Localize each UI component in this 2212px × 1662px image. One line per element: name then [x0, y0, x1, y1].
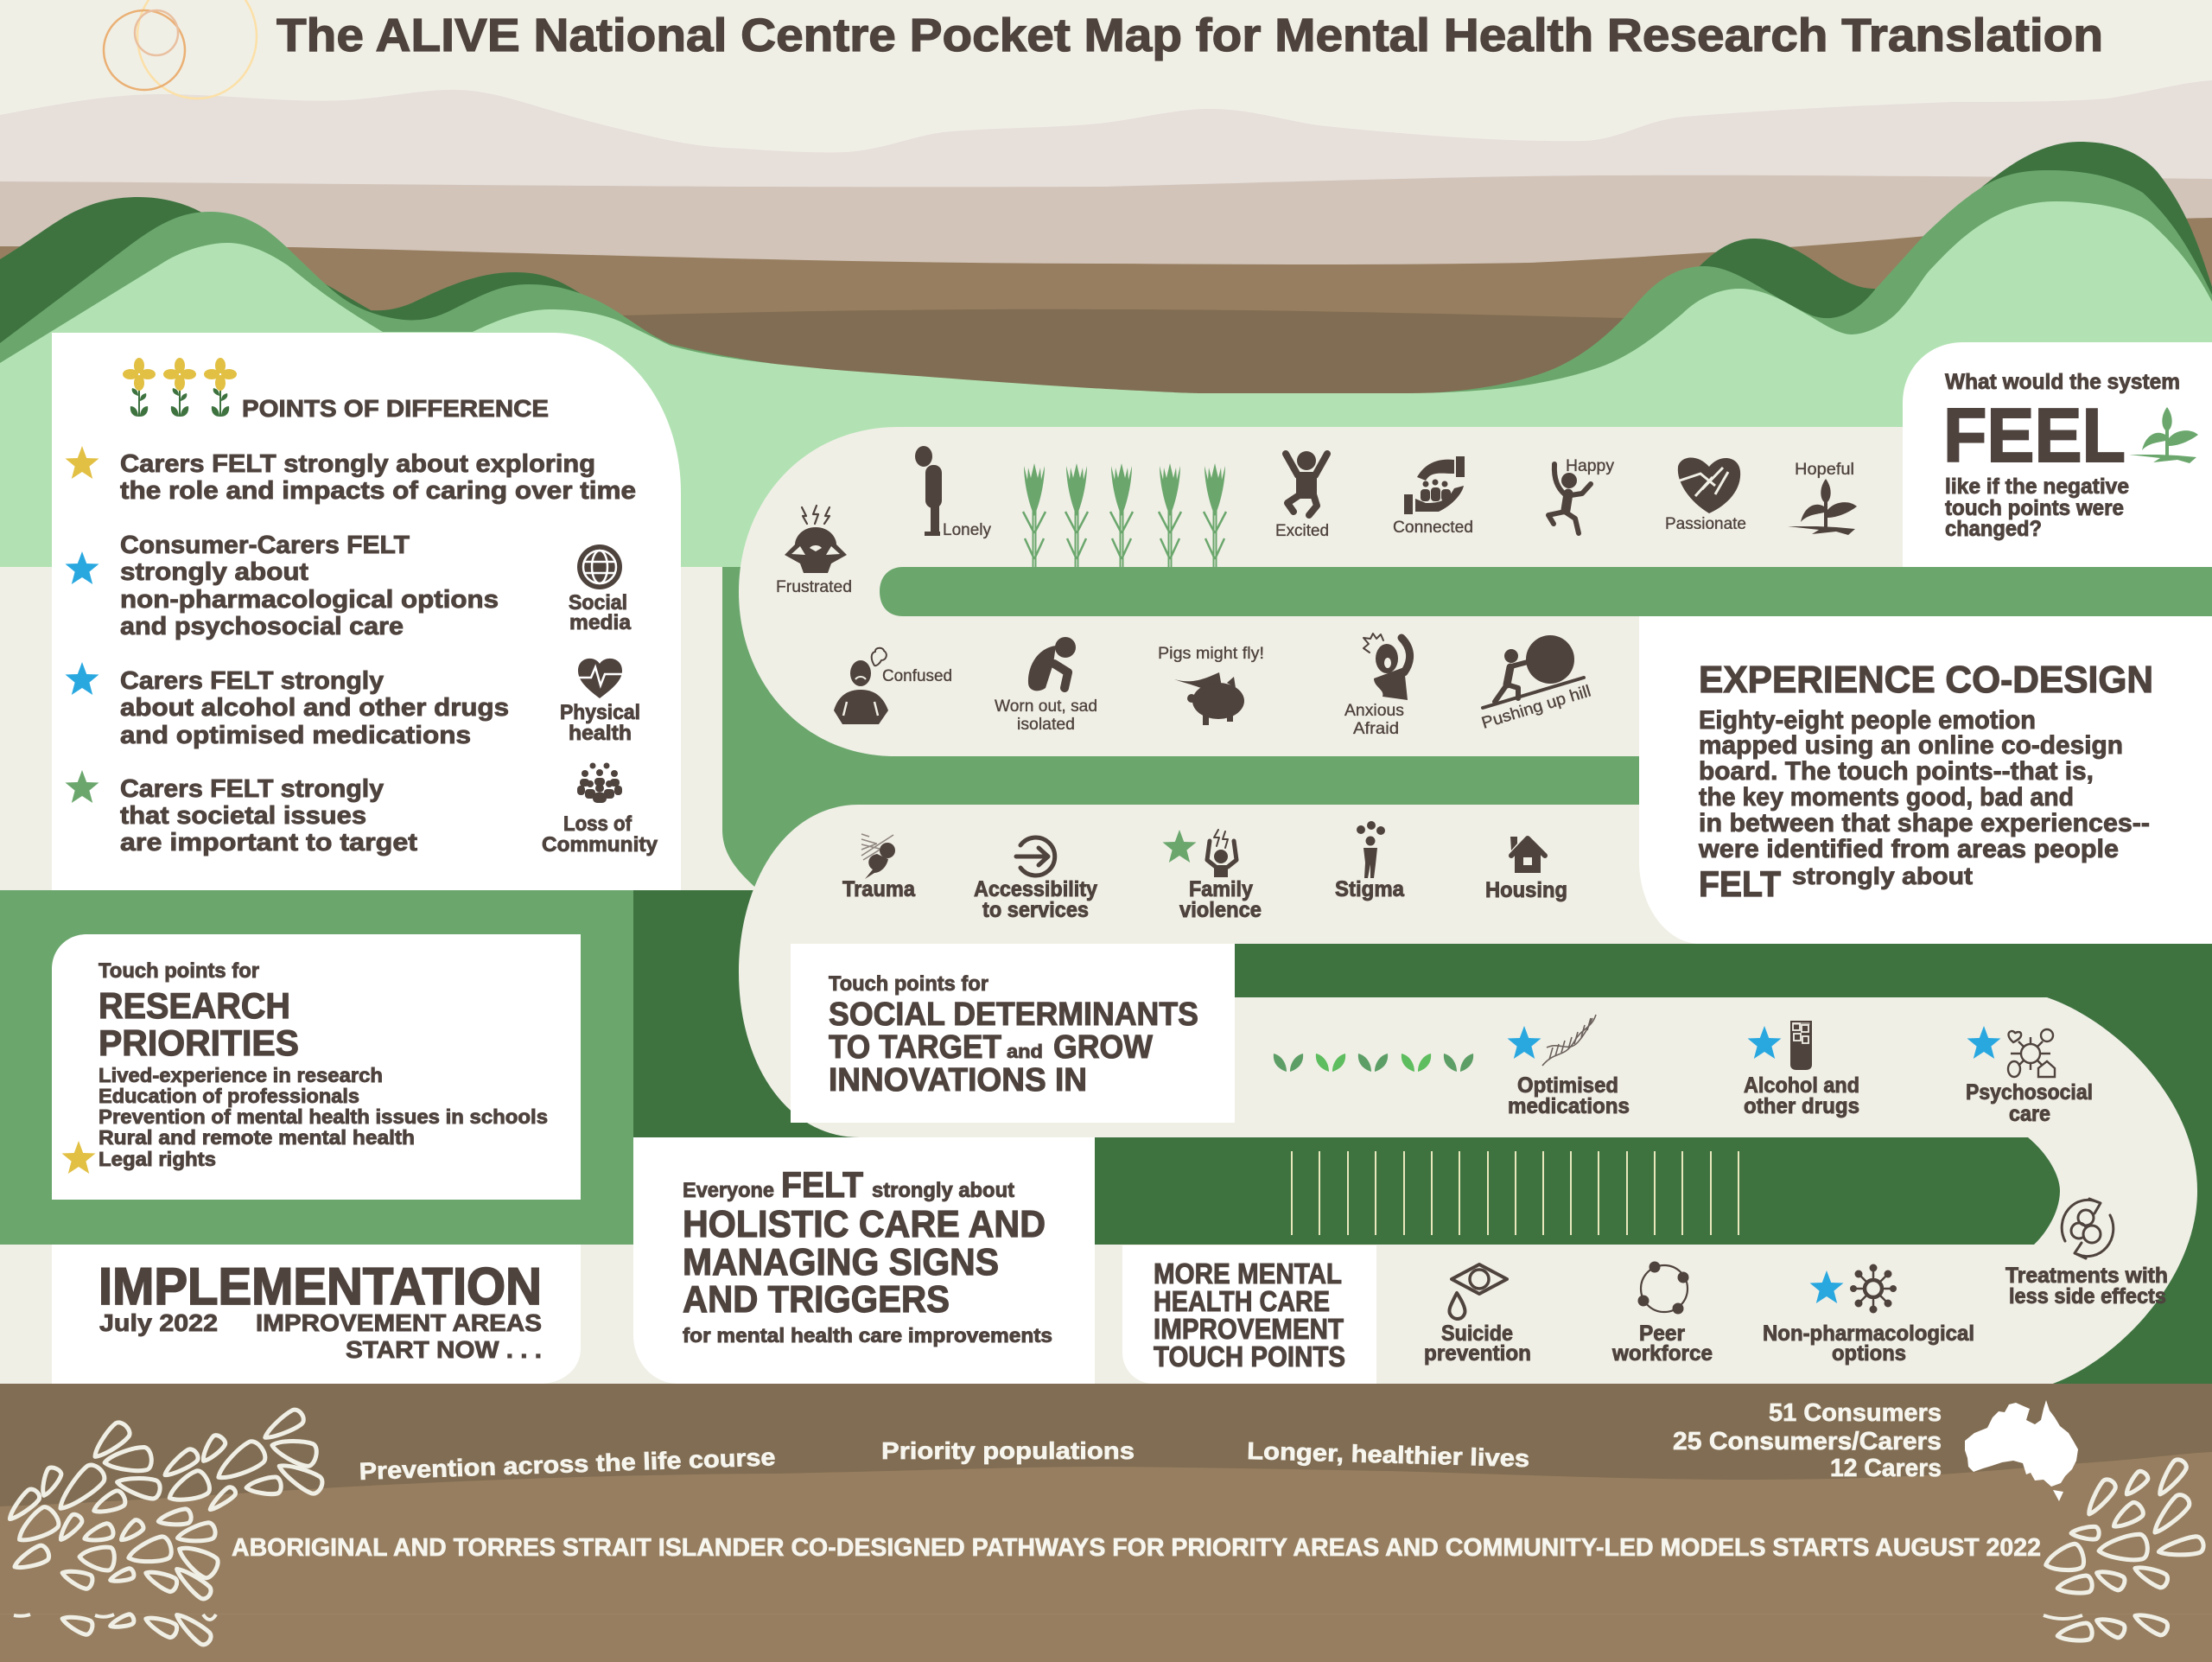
icon: non-pharmacological hub [1850, 1264, 1897, 1314]
icon: accessibility arrow in circle [1016, 837, 1055, 876]
panel: implementation: START NOW . . . [346, 1336, 542, 1363]
point: societal issues: are important to target [120, 829, 417, 856]
label: alcohol and other drugs: Alcohol and [1744, 1073, 1859, 1098]
icon: pushing boulder uphill [1483, 635, 1584, 708]
label: alcohol and other drugs [1744, 1073, 1859, 1118]
icon: hopeful sprout [1788, 479, 1857, 535]
panel: what would the system feel [1903, 342, 2212, 567]
footer text: prevention: Prevention across the life course [359, 1443, 776, 1485]
point: alcohol and drugs: and optimised medications [120, 722, 471, 749]
title: The ALIVE National Centre Pocket Map for Mental Health Research Translation [276, 10, 2103, 61]
label: Passionate: Passionate [1665, 515, 1746, 533]
pathway: mid green connector [864, 756, 1642, 806]
panel: implementation: IMPROVEMENT AREAS [256, 1309, 542, 1336]
pathway: dark green inner bar [1095, 1137, 2060, 1245]
label: Family violence: Family [1189, 877, 1253, 901]
label: social media [569, 591, 632, 634]
star: gold, legal rights [62, 1141, 95, 1174]
panel: implementation [52, 1245, 581, 1384]
icon: heart with pulse [577, 659, 624, 698]
panel: experience co-design: FELT [1699, 863, 1781, 904]
panel: social determinants: TO TARGET [829, 1029, 1001, 1066]
label: Accessibility to services: to services [982, 898, 1089, 922]
label: Anxious Afraid: Anxious [1344, 702, 1404, 720]
panel: more mental health care improvement touch points: IMPROVEMENT [1154, 1313, 1344, 1345]
label: Connected: Connected [1393, 519, 1473, 537]
icon: globe [577, 544, 622, 589]
icon: confused [834, 648, 888, 724]
icon: passionate heart with hands [1678, 457, 1740, 513]
star: blue [66, 662, 99, 695]
sugarcane plants [1023, 463, 1226, 567]
label: Worn out, sad isolated: isolated [1017, 716, 1075, 734]
pathway: third cream band with right curve [1089, 997, 2197, 1385]
icon: anxious figure [1363, 634, 1410, 700]
label: Hopeful: Hopeful [1795, 461, 1854, 479]
icon: green sprout [2129, 407, 2198, 463]
label: Family violence [1179, 877, 1262, 922]
green leaf row [1274, 1054, 1473, 1072]
point: carers exploring: the role and impacts of caring over time [120, 477, 636, 505]
label: Housing: Housing [1485, 878, 1567, 902]
icon: lonely [915, 446, 942, 536]
label: optimised medications [1508, 1073, 1630, 1118]
panel: holistic care: AND TRIGGERS [683, 1278, 950, 1321]
panel: research priorities: Rural and remote mental health [99, 1126, 415, 1149]
panel: what would the system feel: like if the negative [1945, 474, 2129, 499]
panel: points of difference [52, 333, 681, 890]
point: societal issues: Carers FELT strongly [120, 775, 384, 803]
icon: sun rings [104, 0, 257, 99]
point: societal issues [120, 775, 417, 856]
icon: glass of alcohol [1790, 1021, 1812, 1070]
icon: connected hands [1404, 456, 1465, 514]
panel: more mental health care improvement touch points: MORE MENTAL [1154, 1258, 1342, 1289]
label: treatments with less side effects [2005, 1264, 2168, 1309]
footer text: priority populations: Priority populations [881, 1437, 1135, 1464]
star: gold [66, 446, 99, 479]
icon: yellow flowers [123, 358, 237, 417]
panel: what would the system feel: changed? [1945, 517, 2042, 541]
label: suicide prevention [1424, 1321, 1531, 1366]
pebble pattern left [4, 1407, 325, 1647]
label: loss of community: Loss of [563, 812, 632, 836]
icon: star, psychosocial [1967, 1026, 2001, 1059]
label: non-pharmacological options [1763, 1321, 1974, 1366]
icon: treatments cycle with pills [2062, 1199, 2113, 1258]
panel: what would the system feel: FEEL [1943, 392, 2126, 478]
label: psychosocial care: Psychosocial [1966, 1080, 2093, 1105]
label: peer workforce: Peer [1639, 1321, 1685, 1346]
star: blue [66, 551, 99, 584]
participant counts [1673, 1399, 1942, 1482]
panel: research priorities: RESEARCH [99, 985, 290, 1026]
icon: star, non-pharmacological [1809, 1270, 1844, 1303]
point: consumer-carers: and psychosocial care [120, 613, 404, 640]
label: Anxious Afraid [1344, 702, 1404, 738]
label: Excited: Excited [1275, 522, 1329, 540]
icon: happy jumping figure [1548, 464, 1591, 533]
label: suicide prevention: Suicide [1441, 1321, 1513, 1346]
label: physical health: Physical [560, 701, 640, 724]
label: Pushing up hill: Pushing up hill [1479, 682, 1593, 733]
panel: social determinants: and [1007, 1041, 1043, 1062]
icon: family violence [1207, 830, 1236, 877]
panel: experience co-design: board. The touch points--that is, [1699, 757, 2094, 786]
panel: experience co-design: strongly about [1792, 863, 1973, 889]
panel: experience co-design: Eighty-eight people emotion [1699, 706, 2036, 735]
point: consumer-carers: Consumer-Carers FELT [120, 532, 410, 559]
point: carers exploring [120, 450, 636, 505]
panel: research priorities: Education of professionals [99, 1085, 359, 1107]
icon: map of Australia [1965, 1400, 2078, 1501]
panel: experience co-design: mapped using an online co-design [1699, 731, 2123, 760]
panel: experience co-design: in between that shape experiences-- [1699, 809, 2150, 837]
footer text: longer, healthier lives: Longer, healthier lives [1247, 1437, 1530, 1472]
panel: research priorities [52, 934, 581, 1200]
label: Stigma: Stigma [1335, 877, 1405, 901]
heading: points of difference: POINTS OF DIFFERENCE [242, 395, 549, 422]
panel: research priorities: Legal rights [99, 1148, 216, 1170]
point: carers exploring: Carers FELT strongly about exploring [120, 450, 595, 478]
label: Frustrated: Frustrated [776, 578, 852, 596]
panel: experience co-design: were identified from areas people [1698, 835, 2119, 863]
icon: flying pig [1174, 672, 1244, 725]
label: Happy: Happy [1566, 457, 1615, 475]
point: alcohol and drugs: about alcohol and other drugs [120, 694, 509, 722]
point: alcohol and drugs [120, 667, 509, 749]
panel: social determinants [791, 944, 1235, 1123]
star: green [66, 770, 99, 803]
icon: trauma [861, 834, 895, 879]
label: physical health: health [569, 722, 632, 745]
panel: research priorities: Touch points for [99, 959, 259, 983]
panel: what would the system feel: touch points were [1945, 496, 2124, 520]
pebble pattern right [2043, 1457, 2205, 1644]
icon: peer ring [1638, 1262, 1688, 1314]
panel: social determinants: SOCIAL DETERMINANTS [829, 997, 1198, 1033]
panel: holistic care: HOLISTIC CARE AND [683, 1203, 1046, 1245]
point: consumer-carers: strongly about [120, 558, 308, 586]
icon: psychosocial network [2008, 1029, 2055, 1077]
panel: holistic care: FELT [781, 1164, 863, 1205]
panel: holistic care: for mental health care improvements [683, 1324, 1052, 1347]
panel: implementation: IMPLEMENTATION [99, 1258, 542, 1315]
panel: holistic care: Everyone [683, 1179, 774, 1202]
label: psychosocial care [1966, 1080, 2093, 1126]
panel: social determinants: INNOVATIONS IN [829, 1062, 1087, 1098]
footer: earth band [0, 1384, 2212, 1662]
label: Family violence: violence [1179, 898, 1262, 922]
label: Pigs might fly!: Pigs might fly! [1158, 645, 1264, 663]
icon: star, family violence [1163, 830, 1196, 863]
panel: holistic care: strongly about [872, 1179, 1014, 1202]
panel: holistic care [633, 1137, 1095, 1384]
label: peer workforce [1611, 1321, 1713, 1366]
label: Trauma: Trauma [842, 877, 916, 901]
panel: what would the system feel: What would the system [1945, 370, 2180, 394]
panel: research priorities: Prevention of mental health issues in schools [99, 1105, 548, 1128]
panel: holistic care: MANAGING SIGNS [683, 1241, 999, 1283]
label: treatments with less side effects: less side effects [2009, 1284, 2166, 1309]
icon: star, optimised medications [1507, 1026, 1541, 1059]
label: suicide prevention: prevention [1424, 1341, 1531, 1366]
icon: frustrated [785, 506, 847, 573]
label: optimised medications: medications [1508, 1094, 1630, 1118]
point: alcohol and drugs: Carers FELT strongly [120, 667, 384, 695]
pathway: second cream band [739, 805, 1642, 1137]
participant counts: 25 Consumers/Carers [1673, 1428, 1942, 1455]
label: Lonely: Lonely [943, 521, 991, 539]
participant counts: 12 Carers [1830, 1455, 1942, 1482]
participant counts: 51 Consumers [1769, 1399, 1942, 1427]
point: societal issues: that societal issues [120, 802, 366, 830]
label: peer workforce: workforce [1611, 1341, 1713, 1366]
label: loss of community [542, 812, 658, 856]
label: non-pharmacological options: options [1832, 1341, 1906, 1366]
panel: more mental health care improvement touch points [1122, 1245, 1376, 1384]
label: loss of community: Community [542, 833, 658, 856]
panel: more mental health care improvement touch points: TOUCH POINTS [1154, 1340, 1345, 1372]
panel: research priorities: Lived-experience in research [99, 1064, 383, 1086]
label: social media: media [569, 611, 632, 634]
label: Worn out, sad isolated [995, 697, 1097, 734]
icon: stigma [1357, 821, 1385, 878]
label: Anxious Afraid: Afraid [1353, 720, 1399, 738]
pathway: green surround [0, 567, 2212, 1384]
label: Accessibility to services [974, 877, 1097, 922]
panel: more mental health care improvement touch points: HEALTH CARE [1154, 1285, 1330, 1317]
landscape: distant hills and earth layers [0, 80, 2212, 432]
icon: dna helix [1542, 1015, 1596, 1066]
vertical reed lines [1292, 1151, 1738, 1235]
panel: research priorities: PRIORITIES [99, 1022, 299, 1063]
point: consumer-carers [120, 532, 499, 640]
label: treatments with less side effects: Treatments with [2005, 1264, 2168, 1288]
panel: experience co-design: EXPERIENCE CO-DESIGN [1699, 659, 2153, 701]
icon: community cluster [577, 762, 622, 803]
pathway: first cream band with emotions [739, 427, 1910, 756]
label: alcohol and other drugs: other drugs [1744, 1094, 1859, 1118]
panel: experience co-design [1639, 616, 2212, 944]
point: consumer-carers: non-pharmacological options [120, 586, 499, 614]
label: physical health [560, 701, 640, 745]
panel: experience co-design: the key moments good, bad and [1699, 783, 2074, 812]
icon: house [1510, 837, 1545, 873]
label: social media: Social [569, 591, 627, 614]
label: psychosocial care: care [2009, 1102, 2050, 1126]
label: Confused: Confused [882, 667, 952, 685]
pathway: top green bar [880, 567, 2212, 616]
panel: social determinants: Touch points for [829, 972, 988, 996]
footer banner text: ABORIGINAL AND TORRES STRAIT ISLANDER CO-DESIGNED PATHWAYS FOR PRIORITY AREAS AND COMMUNITY-LED MODELS STARTS AUGUST 2022 [232, 1534, 2041, 1562]
panel: social determinants: GROW [1053, 1029, 1153, 1066]
label: optimised medications: Optimised [1517, 1073, 1618, 1098]
icon: worn out figure [1028, 637, 1076, 691]
icon: eye with tear [1449, 1264, 1507, 1319]
label: Worn out, sad isolated: Worn out, sad [995, 697, 1097, 716]
landscape: green hills [0, 142, 2212, 567]
label: Accessibility to services: Accessibility [974, 877, 1097, 901]
panel: implementation: July 2022 [99, 1309, 218, 1336]
label: non-pharmacological options: Non-pharmacological [1763, 1321, 1974, 1346]
icon: excited [1286, 451, 1327, 515]
icon: star, alcohol [1747, 1026, 1782, 1059]
